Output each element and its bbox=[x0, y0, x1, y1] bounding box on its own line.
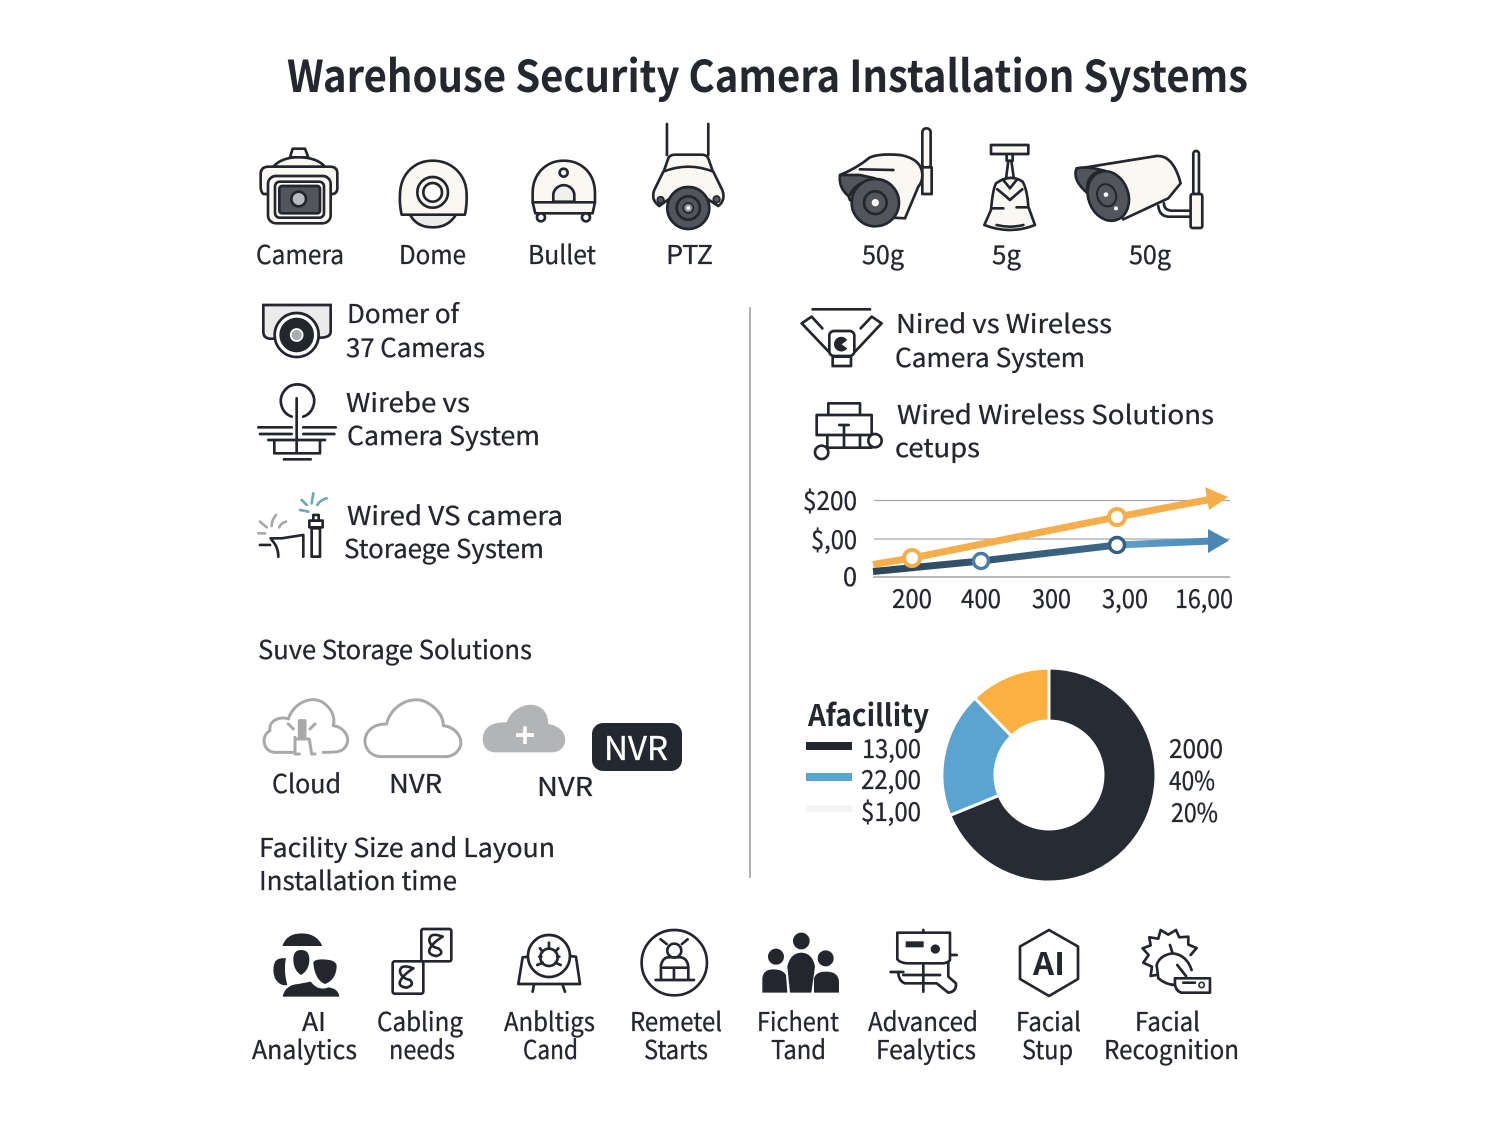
donut values: 20% bbox=[1171, 793, 1218, 830]
storage options bbox=[264, 700, 682, 804]
icon: outline cloud bbox=[365, 700, 461, 757]
label: AI analytics: AI bbox=[302, 1002, 326, 1039]
x axis labels: 300 bbox=[1032, 579, 1071, 616]
label: cabling needs: Cabling bbox=[377, 1002, 463, 1039]
label: cabling needs: needs bbox=[389, 1030, 455, 1067]
text: nired vs wireless bbox=[895, 304, 1112, 375]
text: facility size and layout: Installation time bbox=[259, 861, 457, 898]
icon: camera bbox=[261, 149, 337, 223]
x axis labels: 400 bbox=[961, 579, 1001, 616]
text: wirebe vs camera system bbox=[346, 383, 540, 453]
y axis labels: $,00 bbox=[811, 520, 857, 557]
label: cloud: Cloud bbox=[272, 764, 341, 801]
label: remetel starts bbox=[630, 1002, 722, 1067]
icon: ceiling mount wireless camera bbox=[802, 309, 882, 366]
icon: gear on stand bbox=[518, 935, 580, 992]
icon: ceiling camera bbox=[984, 145, 1035, 230]
line chart bbox=[803, 481, 1233, 616]
text: domer of 37 cameras bbox=[346, 294, 485, 365]
icon: dome camera bbox=[263, 305, 331, 357]
icon: three people bbox=[762, 933, 839, 993]
text: wired vs camera storage system: Storaege System bbox=[344, 529, 544, 566]
label: 50g left: 50g bbox=[862, 235, 904, 272]
icon: wall mounted bullet camera bbox=[1075, 151, 1202, 228]
icon: dome bbox=[400, 161, 467, 227]
icon: wired network setup bbox=[815, 403, 882, 459]
donut legend bbox=[806, 691, 929, 829]
camera types row, left bbox=[256, 124, 723, 272]
label: AI analytics bbox=[252, 1002, 357, 1067]
icon: cabling blocks bbox=[393, 929, 451, 994]
label: fichent tand: Fichent bbox=[757, 1002, 839, 1039]
x axis labels: 3,00 bbox=[1102, 579, 1148, 616]
label: PTZ: PTZ bbox=[666, 235, 713, 272]
text: wirebe vs camera system: Wirebe vs bbox=[346, 383, 470, 420]
badge: NVR bbox=[592, 722, 682, 771]
text: facility size and layout bbox=[259, 828, 555, 898]
icon: AI hexagon: AI bbox=[1032, 939, 1065, 984]
left column feature list bbox=[258, 294, 563, 566]
text: wired vs camera storage system bbox=[344, 496, 563, 566]
text: wired wireless solutions bbox=[895, 395, 1214, 465]
icon: gear hand card bbox=[1143, 930, 1210, 993]
donut values: 40% bbox=[1169, 761, 1215, 798]
label: advanced fealytics bbox=[868, 1002, 978, 1067]
y axis labels: $200 bbox=[803, 481, 857, 518]
icon: PTZ bbox=[653, 124, 723, 229]
label: facial stup: Facial bbox=[1016, 1002, 1081, 1039]
legend item 1: 13,00 bbox=[862, 729, 921, 766]
label: NVR first: NVR bbox=[389, 764, 442, 801]
text: wired wireless solutions: Wired Wireless Solutions bbox=[897, 395, 1214, 432]
label: anbltigs cand: Cand bbox=[523, 1030, 578, 1067]
label: cabling needs bbox=[377, 1002, 463, 1067]
label: remetel starts: Starts bbox=[644, 1030, 708, 1067]
icon: wired mount bbox=[258, 384, 336, 459]
text: wired wireless solutions: cetups bbox=[895, 428, 980, 465]
label: 5g: 5g bbox=[992, 235, 1021, 272]
label: bullet: Bullet bbox=[528, 235, 596, 272]
icon: people group bbox=[273, 933, 339, 997]
label: remetel starts: Remetel bbox=[630, 1002, 722, 1039]
label: advanced fealytics: Fealytics bbox=[876, 1030, 976, 1067]
icon: AI hexagon bbox=[1020, 930, 1078, 996]
label: dome: Dome bbox=[399, 235, 466, 272]
text: domer of 37 cameras: Domer of bbox=[347, 294, 461, 331]
heading: storage solutions: Suve Storage Solutions bbox=[258, 630, 532, 667]
label: facial stup bbox=[1016, 1002, 1081, 1067]
text: nired vs wireless: Nired vs Wireless bbox=[896, 304, 1112, 341]
label: NVR second: NVR bbox=[537, 767, 593, 804]
donut values: 2000 bbox=[1169, 729, 1223, 766]
y axis labels bbox=[803, 481, 857, 594]
text: nired vs wireless: Camera System bbox=[895, 338, 1085, 375]
icon: advanced console bbox=[891, 930, 957, 993]
right column feature list bbox=[802, 304, 1214, 465]
badge: NVR: NVR bbox=[604, 722, 668, 770]
y axis labels: 0 bbox=[843, 557, 857, 594]
text: wirebe vs camera system: Camera System bbox=[347, 416, 540, 453]
label: facial stup: Stup bbox=[1022, 1030, 1073, 1067]
label: anbltigs cand bbox=[504, 1002, 595, 1067]
bottom features row bbox=[252, 929, 1239, 1067]
icon: storage signal post bbox=[258, 493, 327, 557]
x axis labels: 200 bbox=[892, 579, 932, 616]
legend heading: Afacillity bbox=[807, 691, 929, 735]
icon: bullet bbox=[533, 161, 595, 221]
icon: cloud with connector bbox=[264, 700, 348, 754]
label: 50g right: 50g bbox=[1129, 235, 1171, 272]
camera types row, right bbox=[840, 128, 1202, 272]
label: advanced fealytics: Advanced bbox=[868, 1002, 978, 1039]
text: domer of 37 cameras: 37 Cameras bbox=[346, 328, 485, 365]
text: wired vs camera storage system: Wired VS camera bbox=[347, 496, 563, 533]
x axis labels bbox=[892, 579, 1233, 616]
label: camera: Camera bbox=[256, 235, 344, 272]
label: fichent tand bbox=[757, 1002, 839, 1067]
label: facial recognition: Facial bbox=[1135, 1002, 1200, 1039]
legend item 2: 22,00 bbox=[861, 760, 921, 797]
icon: person in circle bbox=[642, 930, 707, 995]
label: anbltigs cand: Anbltigs bbox=[504, 1002, 595, 1039]
x axis labels: 16,00 bbox=[1175, 579, 1233, 616]
donut values bbox=[1169, 729, 1223, 830]
text: facility size and layout: Facility Size and Layoun bbox=[259, 828, 555, 865]
series: orange line bbox=[873, 487, 1228, 566]
label: AI analytics: Analytics bbox=[252, 1030, 357, 1067]
title: Warehouse Security Camera Installation Systems bbox=[287, 41, 1248, 105]
icon: filled cloud with plus bbox=[483, 705, 565, 752]
donut chart bbox=[942, 668, 1156, 882]
label: facial recognition bbox=[1104, 1002, 1239, 1067]
icon: wireless bullet camera bbox=[840, 128, 932, 226]
legend item 3: $1,00 bbox=[861, 792, 921, 829]
series: blue line bbox=[873, 529, 1229, 572]
label: facial recognition: Recognition bbox=[1104, 1030, 1239, 1067]
label: fichent tand: Tand bbox=[771, 1030, 826, 1067]
